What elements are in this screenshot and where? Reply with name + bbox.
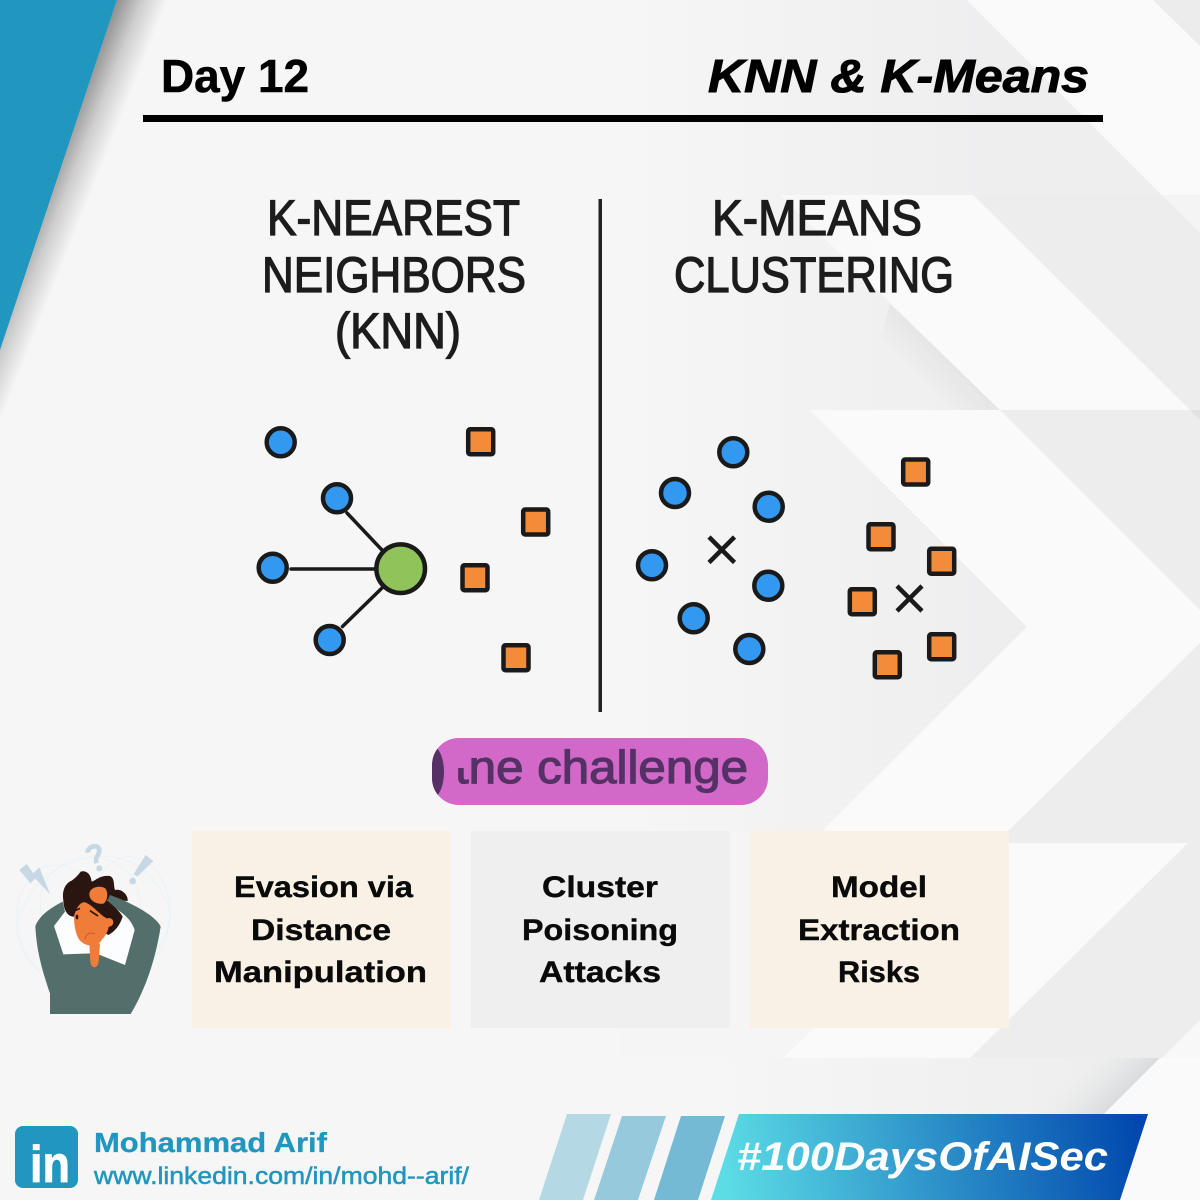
heading: K-Nearest Neighbors: NEIGHBORS — [262, 247, 526, 303]
card: evasion: Distance — [251, 914, 391, 947]
profile url: www.linkedin.com/in/mohd--arif/ — [93, 1163, 469, 1190]
scribble cloud — [16, 856, 170, 975]
hair behind the arm — [63, 871, 128, 901]
title: day: Day 12 — [161, 50, 309, 102]
title: topic: KNN & K-Means — [708, 50, 1089, 102]
blue class points — [259, 428, 351, 654]
card: cluster poisoning: Poisoning — [522, 914, 678, 947]
card: model extraction: Extraction — [798, 914, 960, 947]
card: model extraction: Risks — [838, 956, 920, 989]
header — [143, 50, 1103, 122]
neck — [89, 943, 100, 967]
heading: K-Nearest Neighbors: K-NEAREST — [267, 190, 520, 246]
card: cluster poisoning: Attacks — [539, 956, 661, 989]
icon: LinkedIn — [15, 1126, 78, 1194]
author name: Mohammad Arif — [94, 1127, 328, 1158]
question mark icon — [88, 846, 99, 863]
hair — [63, 883, 123, 935]
ear — [105, 918, 113, 927]
chart: K-Means diagram — [638, 438, 954, 677]
card: evasion: Manipulation — [214, 956, 427, 989]
card: model extraction: Model — [831, 871, 927, 904]
icon: LinkedIn: in — [30, 1136, 70, 1194]
chart: KNN diagram — [259, 428, 548, 670]
card: model extraction — [750, 831, 1009, 1028]
accent stripes — [539, 1114, 725, 1200]
heading: K-Means Clustering — [674, 190, 954, 303]
heading: K-Nearest Neighbors — [262, 190, 526, 359]
connecting lines — [291, 513, 382, 626]
card: cluster poisoning — [471, 831, 730, 1028]
exclamation icon — [134, 855, 153, 877]
card: evasion: Evasion via — [234, 871, 413, 904]
badge: the challenge: the challenge — [455, 741, 748, 793]
centroid markers — [709, 537, 922, 611]
brows and eye — [75, 908, 98, 916]
gap between the arms — [54, 903, 135, 965]
card: evasion — [192, 831, 451, 1028]
body and arms — [35, 895, 161, 1014]
illustration: stressed person — [16, 846, 170, 1014]
heading: K-Means Clustering: K-MEANS — [712, 190, 922, 246]
badge: the challenge — [420, 738, 768, 805]
orange cluster — [850, 460, 954, 677]
heading: K-Nearest Neighbors: (KNN) — [335, 303, 461, 359]
hand — [89, 887, 107, 904]
blue cluster — [638, 438, 783, 663]
hashtag banner — [539, 1114, 1148, 1200]
orange class points — [462, 429, 548, 670]
teal corner accent — [0, 0, 168, 423]
card: cluster poisoning: Cluster — [542, 871, 658, 904]
hashtag banner: #100DaysOfAISec — [737, 1135, 1108, 1179]
lightning icon — [19, 864, 50, 894]
heading: K-Means Clustering: CLUSTERING — [674, 247, 954, 303]
face — [74, 902, 109, 945]
query point — [376, 544, 425, 593]
